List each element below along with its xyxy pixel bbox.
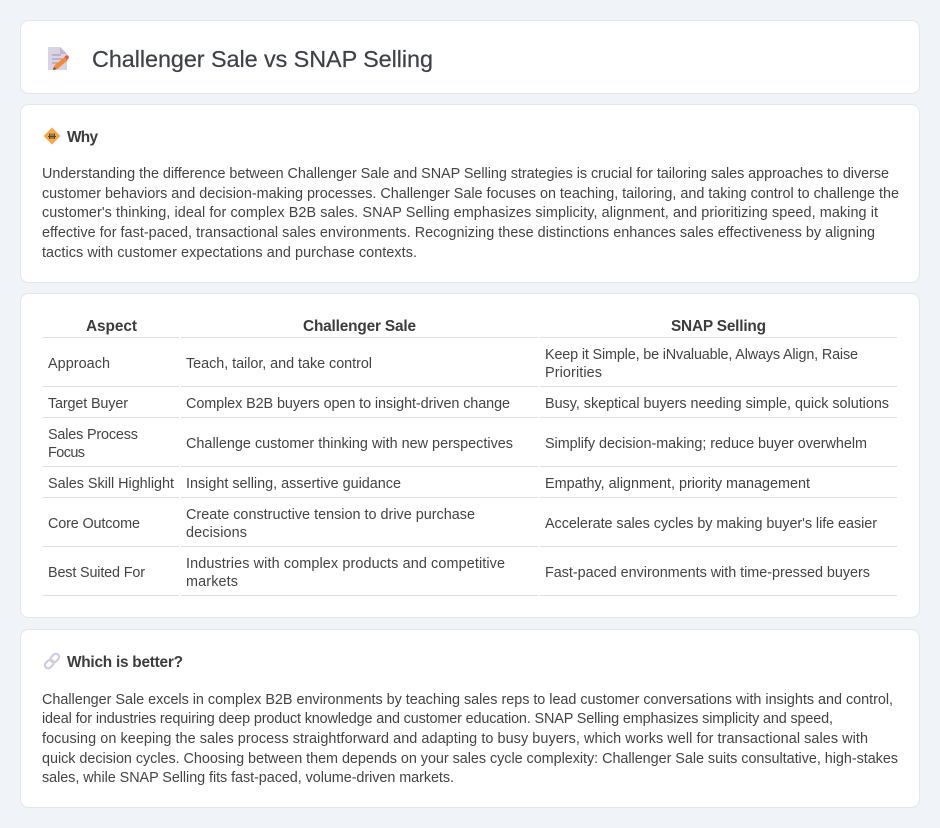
row: target buyer: Busy, skeptical buyers needing simple, quick solutions	[545, 396, 889, 412]
panel: which is better	[20, 630, 920, 808]
icon: warning diamond	[44, 128, 60, 144]
which is better paragraph: quick decision cycles. Choosing between them depends on your sales cycle complexity: Challenger Sale suits consultative, high-stakes	[42, 751, 898, 767]
which is better paragraph	[42, 692, 898, 786]
which is better paragraph: sales, while SNAP Selling fits fast-paced, volume-driven markets.	[42, 770, 454, 786]
panel: why	[20, 104, 920, 282]
why paragraph	[42, 166, 899, 261]
icon: chain link	[44, 652, 60, 670]
row: best suited for: Fast-paced environments with time-pressed buyers	[545, 565, 870, 581]
why paragraph: effective for fast-paced, transactional sales environments. Recognizing these distinctions enhances sales effectiveness by aligning	[42, 225, 875, 241]
row: core outcome: Accelerate sales cycles by making buyer's life easier	[545, 516, 877, 532]
panel: title header	[20, 20, 920, 94]
row: sales process focus	[48, 427, 867, 461]
table header row: Challenger Sale	[303, 318, 416, 335]
which is better paragraph: focusing on keeping the sales process straightforward and adapting to busy buyers, which works well for transactional sales with	[42, 731, 868, 747]
panel: comparison table	[20, 294, 920, 618]
table header row	[86, 318, 766, 335]
row: core outcome: Core Outcome	[48, 516, 140, 532]
which is better paragraph: Challenger Sale excels in complex B2B environments by teaching sales reps to lead customer conversations with insights and control,	[42, 692, 893, 708]
heading: why: Why	[67, 129, 98, 146]
row: target buyer	[48, 396, 889, 412]
row: target buyer: Target Buyer	[48, 396, 128, 412]
row: core outcome	[48, 507, 877, 541]
row: sales skill highlight: Insight selling, assertive guidance	[186, 476, 401, 492]
row: sales process focus: Simplify decision-making; reduce buyer overwhelm	[545, 436, 867, 452]
table header row: SNAP Selling	[671, 318, 766, 335]
why paragraph: customer behaviors and decision-making processes. Challenger Sale focuses on teaching, tailoring, and taking control to challenge the	[42, 186, 899, 202]
row: best suited for: Industries with complex products and competitive	[186, 556, 505, 572]
heading: which is better: Which is better?	[67, 654, 183, 671]
row: approach: Approach	[48, 356, 110, 372]
row: approach	[48, 347, 858, 381]
row: sales skill highlight: Empathy, alignment, priority management	[545, 476, 810, 492]
row: sales process focus: Focus	[48, 445, 85, 461]
row: sales process focus: Challenge customer thinking with new perspectives	[186, 436, 513, 452]
row: sales process focus: Sales Process	[48, 427, 138, 443]
row: approach: Priorities	[545, 365, 602, 381]
table header row: Aspect	[86, 318, 137, 335]
row: best suited for: Best Suited For	[48, 565, 145, 581]
row: approach: Keep it Simple, be iNvaluable, Always Align, Raise	[545, 347, 858, 363]
why paragraph: Understanding the difference between Challenger Sale and SNAP Selling strategies is crucial for tailoring sales approaches to diverse	[42, 166, 889, 182]
which is better paragraph: ideal for industries requiring deep product knowledge and customer education. SNAP Selling emphasizes simplicity and speed,	[42, 711, 833, 727]
why paragraph: customer's thinking, ideal for complex B2B sales. SNAP Selling emphasizes simplicity, alignment, and prioritizing speed, making it	[42, 205, 878, 221]
row: approach: Teach, tailor, and take control	[186, 356, 372, 372]
why paragraph: tactics with customer expectations and purchase contexts.	[42, 245, 417, 261]
row: core outcome: Create constructive tension to drive purchase	[186, 507, 475, 523]
title: Challenger Sale vs SNAP Selling	[92, 46, 433, 72]
row: best suited for	[48, 556, 870, 590]
row: sales skill highlight: Sales Skill Highlight	[48, 476, 174, 492]
row: sales skill highlight	[48, 476, 810, 492]
row: core outcome: decisions	[186, 525, 247, 541]
icon: memo with pencil	[48, 47, 69, 70]
row: best suited for: markets	[186, 574, 238, 590]
row: target buyer: Complex B2B buyers open to insight-driven change	[186, 396, 510, 412]
